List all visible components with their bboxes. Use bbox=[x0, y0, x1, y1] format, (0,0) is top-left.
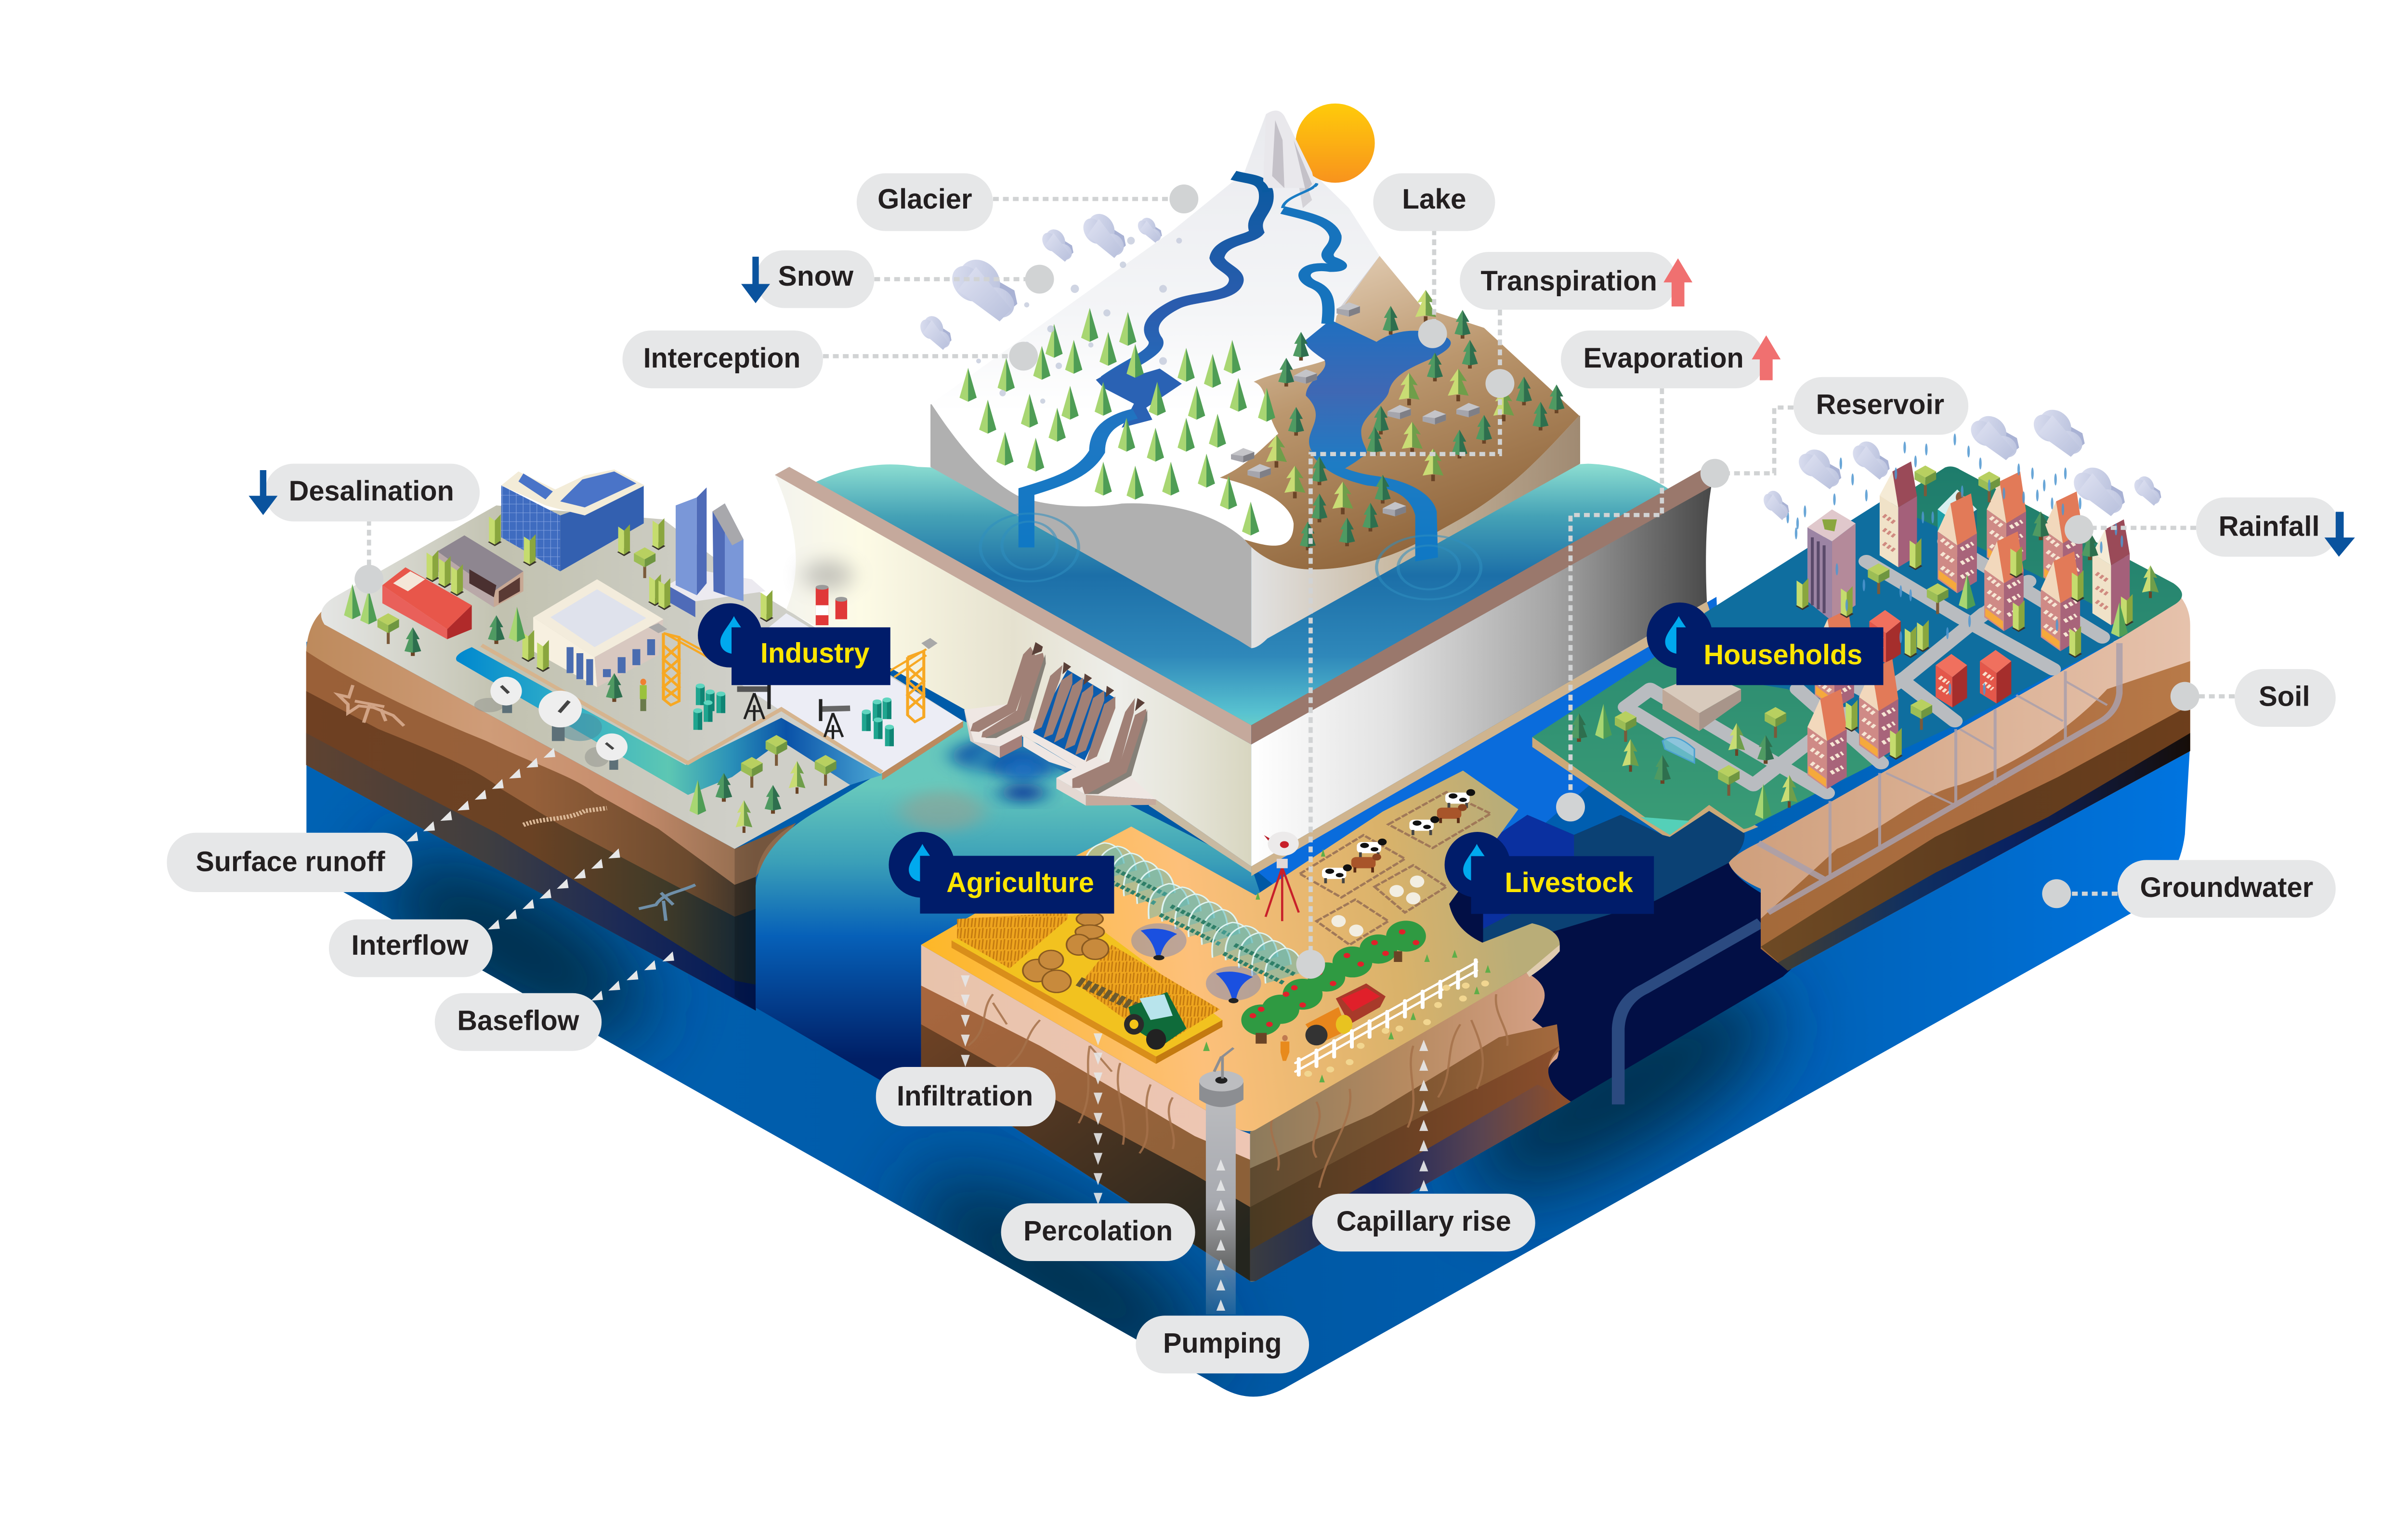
tag: Livestock: Livestock bbox=[1505, 867, 1633, 898]
bus shelter bbox=[1662, 737, 1694, 763]
label: Interception: Interception bbox=[643, 342, 800, 374]
sandy forest ground bbox=[1220, 256, 1579, 569]
rain drops bbox=[1786, 434, 2123, 695]
chickens and crops bbox=[1304, 980, 1489, 1077]
bright water channel behind households bbox=[1251, 597, 1720, 1027]
pumping well bbox=[1199, 1048, 1243, 1315]
label: Desalination bbox=[265, 464, 480, 522]
livestock pens bbox=[1300, 792, 1491, 945]
label: Evaporation: Evaporation bbox=[1584, 342, 1744, 374]
label: Soil: Soil bbox=[2259, 681, 2310, 712]
label: Groundwater: Groundwater bbox=[2140, 872, 2313, 903]
pipe network bbox=[1758, 643, 2120, 913]
label: Infiltration: Infiltration bbox=[897, 1080, 1033, 1112]
apple trees bbox=[1241, 921, 1426, 1044]
blue office building bbox=[501, 470, 645, 571]
label: Soil bbox=[2235, 669, 2336, 727]
white fence bbox=[1296, 960, 1477, 1075]
blue towers bbox=[667, 487, 766, 617]
label: Interception bbox=[622, 330, 823, 388]
flow arrows: capillary rise bbox=[1419, 1040, 1428, 1191]
groundwater base block bbox=[306, 642, 2190, 1407]
forest on sandy ground bbox=[1266, 290, 1565, 550]
flow arrows: pumping bbox=[1217, 1159, 1225, 1311]
label: Evaporation bbox=[1561, 330, 1765, 388]
label: Infiltration bbox=[876, 1067, 1056, 1126]
blue plots bbox=[1704, 501, 2122, 757]
greenhouses bbox=[1084, 843, 1303, 984]
cranes bbox=[663, 633, 926, 722]
label: Percolation bbox=[1001, 1203, 1195, 1261]
triceratops fossil bbox=[338, 685, 404, 726]
label: Surface runoff: Surface runoff bbox=[196, 846, 385, 878]
label: Interflow bbox=[329, 920, 493, 977]
label: Transpiration: Transpiration bbox=[1480, 265, 1657, 297]
label: Pumping bbox=[1136, 1316, 1309, 1373]
reservoir water bbox=[786, 464, 1715, 725]
flow arrows: interflow bbox=[488, 848, 620, 930]
oil pumps bbox=[737, 683, 850, 739]
dam spillways bbox=[964, 642, 1156, 805]
arrow: desalination down bbox=[249, 470, 277, 515]
wheat field bbox=[952, 912, 1222, 1064]
flow arrows: surface runoff bbox=[406, 748, 555, 842]
glacier river bbox=[1106, 175, 1266, 380]
label: Capillary rise: Capillary rise bbox=[1336, 1206, 1511, 1237]
label: Rainfall: Rainfall bbox=[2219, 511, 2320, 542]
panel: agriculture surface bbox=[921, 771, 1560, 1315]
conifers on snow bbox=[959, 308, 1275, 536]
streets bbox=[1625, 541, 2102, 793]
water left of agriculture bbox=[756, 721, 1283, 1155]
sun bbox=[1296, 104, 1375, 183]
dark water around livestock bbox=[1346, 807, 1792, 1112]
lake bbox=[1305, 320, 1451, 472]
rocks bbox=[1231, 303, 1480, 516]
arrow: evaporation up bbox=[1752, 335, 1780, 380]
falling snow bbox=[976, 237, 1182, 404]
label: Desalination: Desalination bbox=[289, 475, 454, 507]
lake inflow river bbox=[1283, 184, 1317, 208]
arrow: rainfall down bbox=[2325, 512, 2355, 557]
label: Rainfall bbox=[2196, 498, 2339, 557]
tag: Industry: Industry bbox=[760, 638, 870, 669]
arrow: snow down bbox=[741, 257, 770, 303]
panel: agriculture soil bbox=[921, 945, 1571, 1282]
label: Percolation: Percolation bbox=[1023, 1215, 1173, 1247]
label: Pumping: Pumping bbox=[1163, 1328, 1282, 1359]
lake outflow river bbox=[1309, 449, 1438, 562]
label: Groundwater bbox=[2118, 860, 2336, 918]
arrow: transpiration up bbox=[1663, 258, 1692, 306]
connector dots bbox=[354, 184, 2199, 979]
worker bbox=[640, 679, 647, 711]
tag: Livestock bbox=[1445, 832, 1654, 914]
label: Glacier bbox=[857, 173, 993, 231]
plesiosaur fossil bbox=[523, 808, 607, 825]
green tractor bbox=[1079, 981, 1187, 1050]
label: Lake: Lake bbox=[1402, 184, 1466, 215]
label: Reservoir bbox=[1793, 377, 1968, 435]
canal bbox=[456, 647, 882, 795]
plant roots bbox=[968, 994, 1507, 1188]
river ripples bbox=[981, 513, 1481, 599]
label: Reservoir: Reservoir bbox=[1816, 389, 1944, 420]
label: Interflow: Interflow bbox=[352, 930, 469, 961]
panel: industry land surface bbox=[321, 505, 963, 849]
grey workshop bbox=[437, 535, 523, 607]
flow arrows: infiltration bbox=[961, 975, 970, 1067]
label: Baseflow bbox=[435, 993, 602, 1051]
red factory bbox=[382, 567, 472, 639]
peak over sun bbox=[1233, 111, 1317, 208]
flow arrows: baseflow bbox=[591, 951, 674, 1000]
connector lines bbox=[369, 199, 2235, 964]
label: Snow bbox=[756, 250, 874, 308]
raptor fossil bbox=[639, 885, 695, 921]
farmer bbox=[1281, 1035, 1289, 1061]
flow arrows: percolation bbox=[1094, 1033, 1102, 1205]
water tanks bbox=[694, 684, 894, 746]
snow clouds bbox=[917, 209, 1163, 351]
label: Baseflow: Baseflow bbox=[457, 1005, 579, 1036]
windmill bbox=[1264, 832, 1299, 921]
rain clouds bbox=[1761, 405, 2163, 521]
label: Transpiration bbox=[1460, 252, 1676, 310]
shrubs and trees bbox=[344, 514, 837, 833]
light concrete yard bbox=[732, 613, 963, 773]
tag: Agriculture bbox=[889, 832, 1114, 914]
label: Snow: Snow bbox=[778, 261, 854, 292]
label: Lake bbox=[1373, 173, 1495, 231]
panel: industry buildings bbox=[344, 470, 938, 833]
label: Capillary rise bbox=[1312, 1194, 1535, 1251]
hay bales bbox=[1023, 912, 1109, 992]
tag: Households: Households bbox=[1703, 639, 1862, 671]
label: Glacier: Glacier bbox=[877, 184, 972, 215]
sprinklers bbox=[1131, 923, 1261, 1003]
panel: households land bbox=[1532, 434, 2182, 837]
orange tractor with apple trailer bbox=[1306, 984, 1386, 1045]
panel: households soil layers bbox=[1729, 597, 2190, 971]
city buildings bbox=[1662, 461, 2130, 789]
satellite dishes bbox=[474, 677, 628, 770]
cows and sheep bbox=[1322, 789, 1475, 936]
mountain block with snow, forest and lake bbox=[930, 111, 1580, 648]
snow slope surface bbox=[931, 111, 1579, 569]
tag: Households bbox=[1647, 603, 1884, 685]
city trees bbox=[1570, 465, 2159, 819]
tag: Industry bbox=[698, 603, 890, 685]
panel: industry soil layers bbox=[306, 611, 796, 1011]
white museum building bbox=[533, 579, 663, 687]
smoke and chimneys bbox=[803, 559, 852, 625]
dam walls bbox=[775, 462, 1715, 876]
label: Surface runoff bbox=[167, 833, 412, 892]
tag: Agriculture: Agriculture bbox=[946, 867, 1094, 898]
peak rock shading bbox=[1266, 116, 1398, 340]
